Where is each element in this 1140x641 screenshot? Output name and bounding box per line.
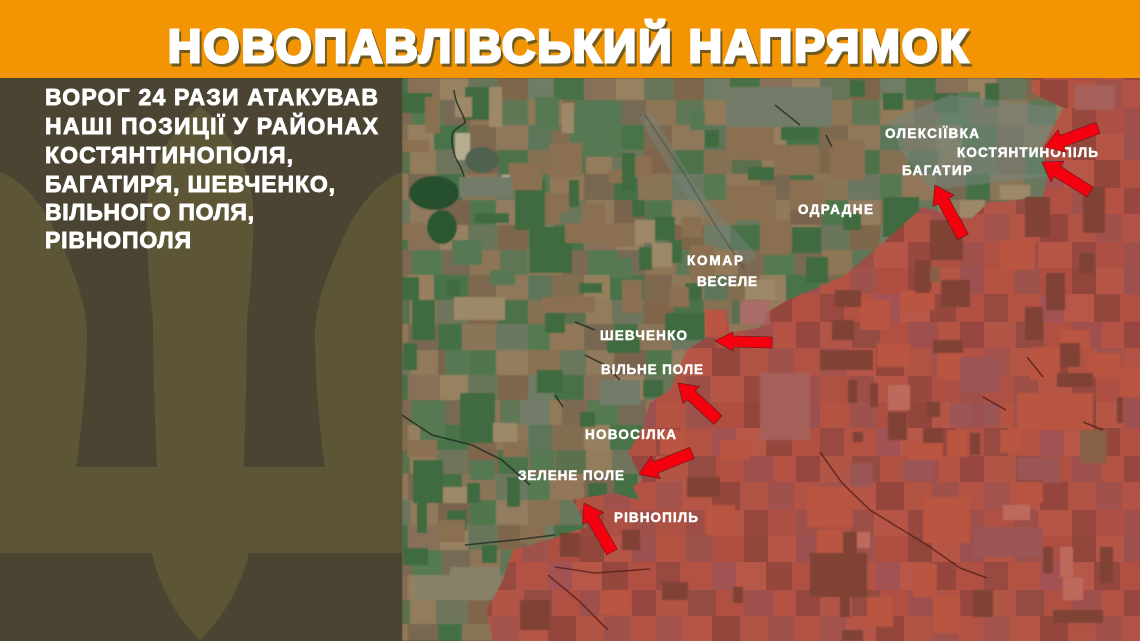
map labels: settlement names: БАГАТИР xyxy=(902,163,972,178)
panel: left text panel with trident xyxy=(0,78,402,641)
text block: attack summary: РІВНОПОЛЯ xyxy=(45,227,191,253)
map labels: settlement names: НОВОСІЛКА xyxy=(585,427,676,442)
arrow: Bahatyr xyxy=(933,185,968,240)
title banner xyxy=(0,0,1140,78)
arrow: Shevchenko xyxy=(715,332,772,351)
text block: attack summary: НАШІ ПОЗИЦІЇ У РАЙОНАХ xyxy=(45,112,379,139)
settlement: Oleksiivka built-up area xyxy=(890,95,1060,190)
arrow: Rivnopil xyxy=(582,503,617,555)
map labels: settlement names: РІВНОПІЛЬ xyxy=(614,510,698,525)
title text: НОВОПАВЛІВСЬКИЙ НАПРЯМОК xyxy=(170,23,971,75)
arrow: Vilne Pole xyxy=(678,383,722,424)
panel: satellite map xyxy=(402,78,1140,641)
occupied territory red overlay xyxy=(487,78,1140,641)
arrows: enemy attack directions xyxy=(582,122,1100,555)
title text: НОВОПАВЛІВСЬКИЙ НАПРЯМОК xyxy=(168,20,969,72)
arrow: Kostiantynopil north xyxy=(1045,122,1100,152)
map labels: settlement names: ШЕВЧЕНКО xyxy=(600,328,687,343)
map labels: settlement names: ВІЛЬНЕ ПОЛЕ xyxy=(601,362,703,377)
map labels: settlement names xyxy=(518,126,1098,525)
map labels: settlement names: ЗЕЛЕНЕ ПОЛЕ xyxy=(518,468,624,483)
arrow: Zelene Pole xyxy=(639,447,694,479)
map labels: settlement names: ОДРАДНЕ xyxy=(798,202,873,217)
rivers and ravines xyxy=(402,90,1103,630)
icon: trident emblem xyxy=(0,106,402,640)
map labels: settlement names: ВЕСЕЛЕ xyxy=(697,274,757,289)
map fields: unoccupied farmland patchwork xyxy=(402,78,1064,641)
map labels: settlement names: КОМАР xyxy=(687,253,743,268)
text block: attack summary: КОСТЯНТИНОПОЛЯ, xyxy=(45,142,293,168)
occupied fields: dark and bright patches xyxy=(487,78,1140,641)
arrow: Kostiantynopil south xyxy=(1042,161,1093,197)
muted veil over occupied territory xyxy=(487,78,1140,641)
map labels: settlement names: КОСТЯНТИНОПІЛЬ xyxy=(957,145,1098,160)
text block: attack summary xyxy=(45,84,379,253)
text block: attack summary: БАГАТИРЯ, ШЕВЧЕНКО, xyxy=(45,171,335,197)
text block: attack summary: ВІЛЬНОГО ПОЛЯ, xyxy=(45,199,254,225)
text block: attack summary: ВОРОГ 24 РАЗИ АТАКУВАВ xyxy=(45,84,378,110)
map labels: settlement names: ОЛЕКСІЇВКА xyxy=(885,126,979,141)
